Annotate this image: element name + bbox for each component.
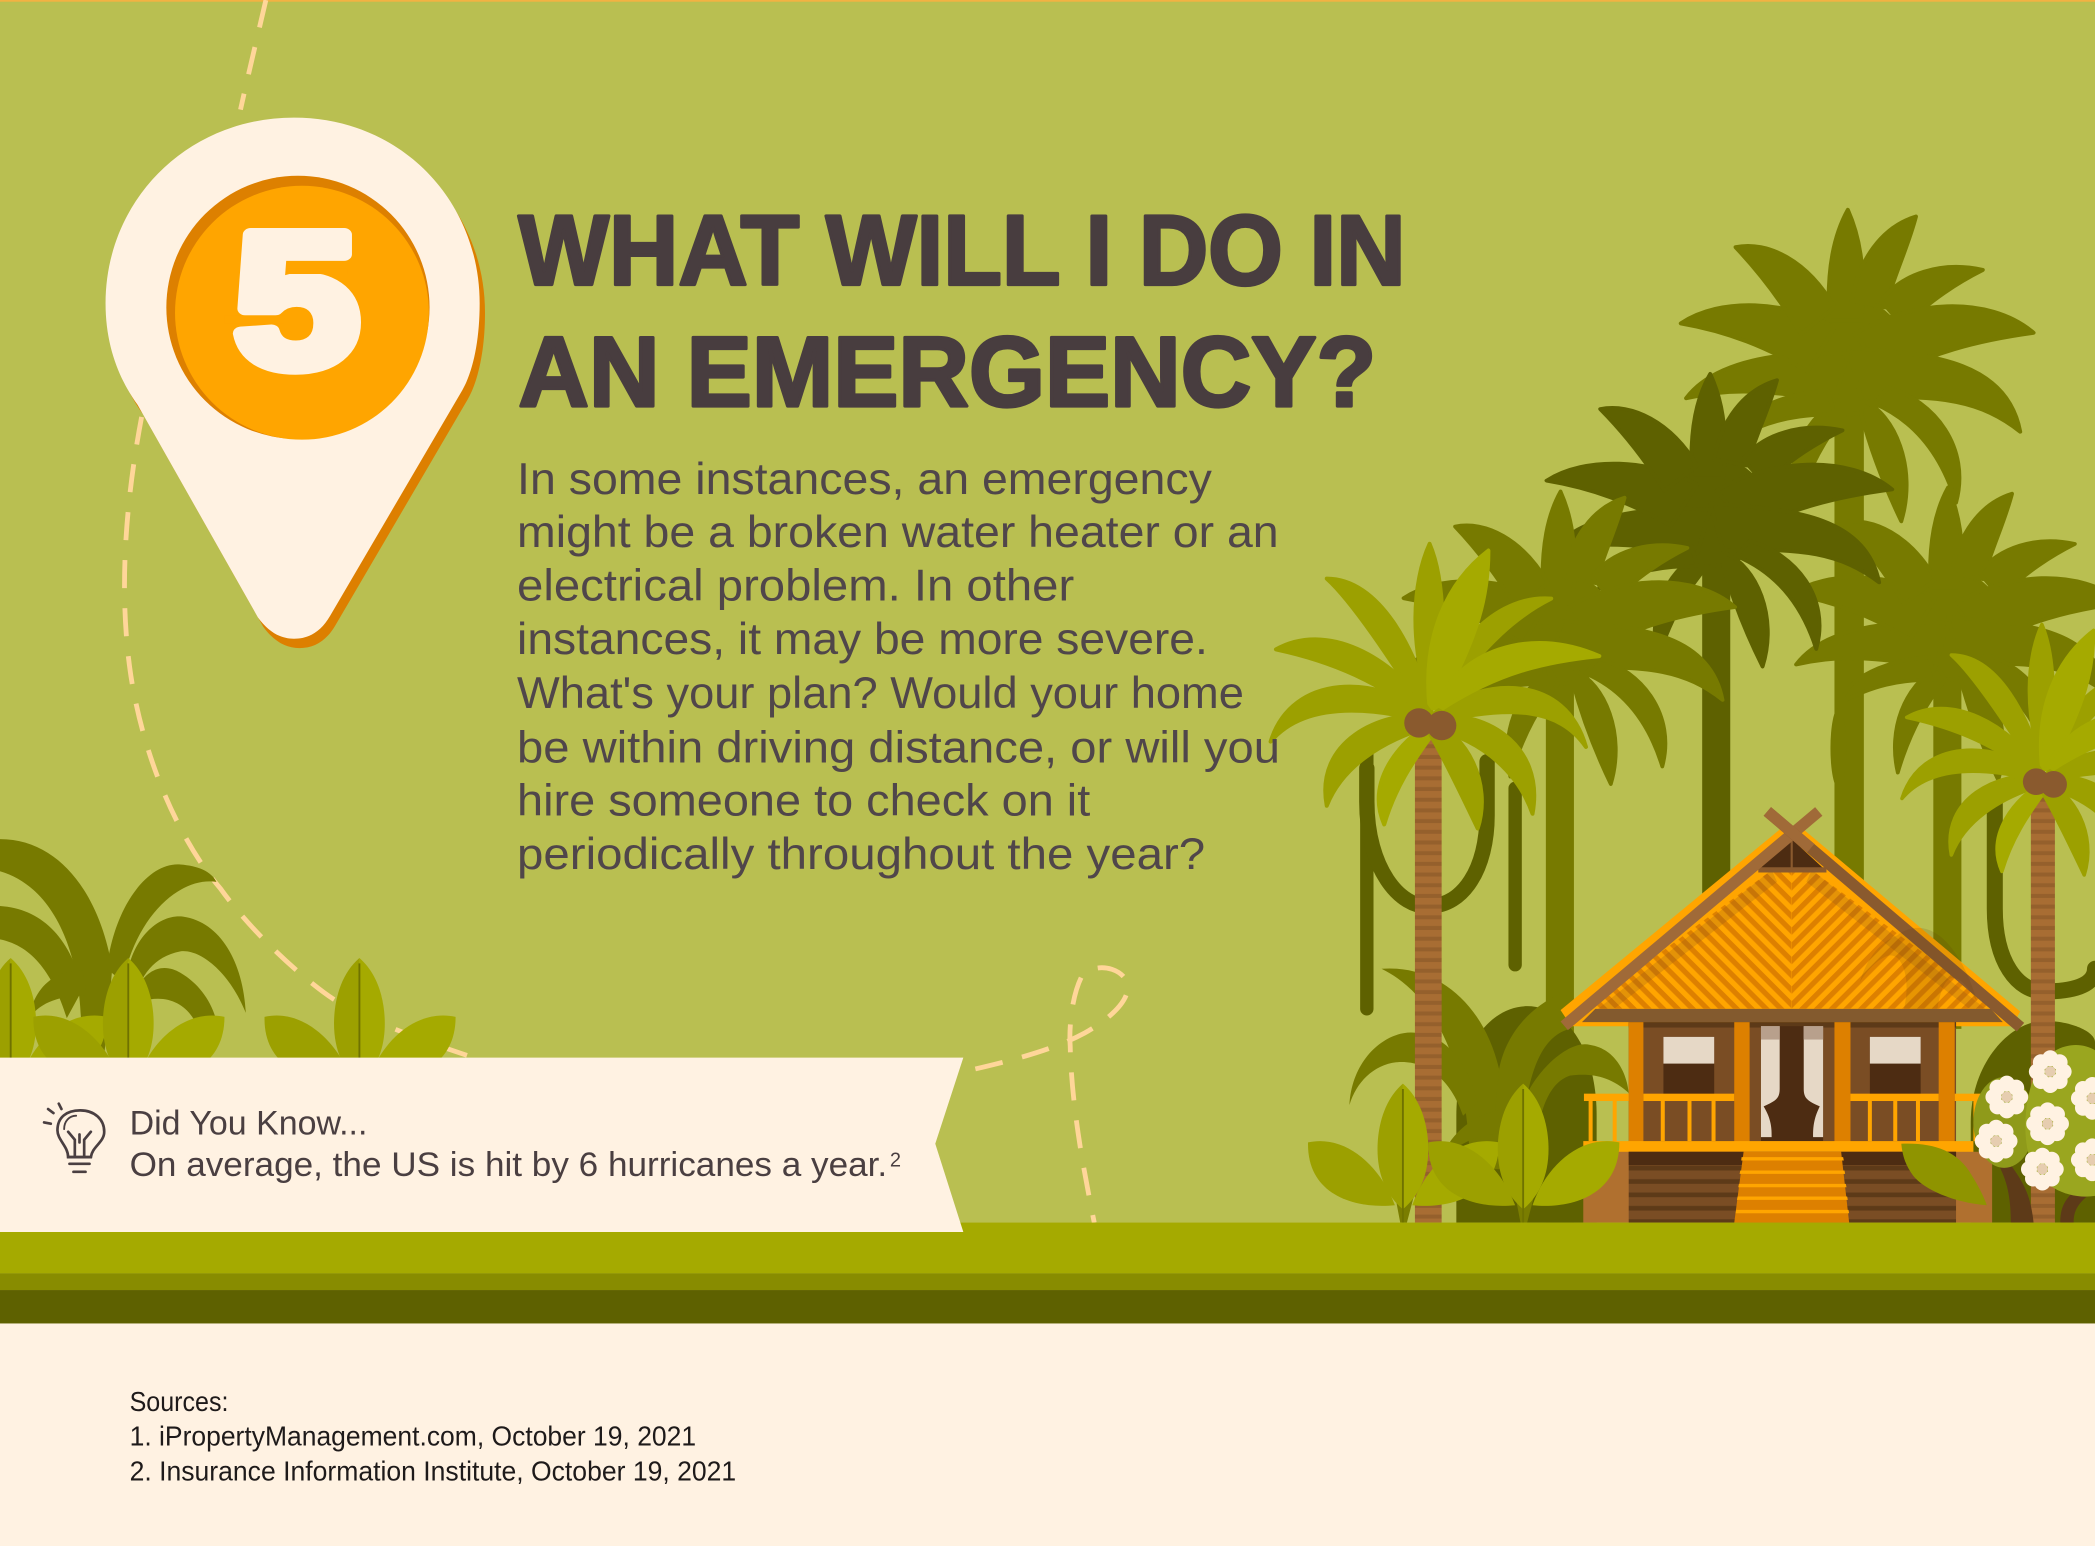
did you know text: On average, the US is hit by 6 hurricanes a year.: [130, 1146, 887, 1184]
tropical plant behind house: [1349, 968, 1629, 1169]
sources: [130, 1386, 736, 1486]
dashed route line: [125, 0, 1128, 1223]
did you know text: 2: [890, 1149, 901, 1171]
hanging vines: [1367, 748, 2095, 1009]
icon: light bulb: [44, 1104, 104, 1172]
roof framing: [1569, 815, 2016, 1024]
banana plant: shrub centre: [33, 958, 224, 1097]
foundation: [1583, 1152, 1992, 1223]
body paragraph: In some instances, an emergency: [517, 455, 1212, 504]
banana leaf: right: [1901, 1144, 1987, 1205]
palm tree: left background: [1404, 491, 1735, 1223]
roof chevron panel: [1597, 872, 1986, 1009]
banana plant: left: [1308, 1084, 1499, 1223]
palm tree: dark middle: [1547, 374, 1892, 909]
flowering bush: [1973, 1045, 2095, 1223]
body paragraph: electrical problem. In other: [517, 562, 1074, 611]
porch railings: [1584, 1094, 1981, 1141]
did you know text: [130, 1104, 901, 1184]
sources: 1. iPropertyManagement.com, October 19, 2021: [130, 1421, 696, 1452]
body paragraph: What's your plan? Would your home: [517, 669, 1244, 718]
eave beam: [1582, 1009, 2003, 1022]
title: WHAT WILL I DO IN: [518, 195, 1406, 306]
ground stripes: [0, 1223, 2095, 1323]
title: [518, 195, 1406, 427]
map pin: [106, 118, 480, 639]
stairs: [1734, 1152, 1849, 1223]
did you know banner: [0, 1058, 963, 1232]
body paragraph: [517, 455, 1280, 879]
body paragraph: be within driving distance, or will you: [517, 723, 1280, 772]
house: [1561, 815, 2020, 1223]
body paragraph: periodically throughout the year?: [517, 830, 1205, 879]
map pin shadow: [111, 127, 485, 648]
banana plant: shrub right: [265, 958, 456, 1097]
palm tree: light front right: [1902, 625, 2095, 1223]
palm shadow on roof: [1860, 928, 1977, 1009]
left shrub fronds: [0, 839, 246, 1056]
footer background: [0, 1323, 2095, 1546]
right window: [1870, 1037, 1921, 1094]
number badge: 5: [234, 194, 359, 407]
banana plant: far left: [0, 958, 107, 1097]
porch posts: [1629, 1022, 1955, 1142]
palm tree: right background: [1791, 487, 2095, 1029]
roof outer thatch: [1561, 828, 2020, 1026]
top accent line: [0, 0, 2095, 2]
gable opening: [1758, 839, 1825, 870]
palm tree: tallest background: [1681, 210, 2034, 895]
walls: [1629, 1022, 1956, 1142]
number badge: [166, 176, 430, 440]
bushes behind house: [1456, 1006, 2095, 1223]
body paragraph: instances, it may be more severe.: [517, 615, 1208, 664]
left window: [1663, 1037, 1714, 1094]
body paragraph: hire someone to check on it: [517, 777, 1090, 826]
porch floor: [1583, 1141, 1973, 1152]
sources: Sources:: [130, 1386, 228, 1417]
sources: 2. Insurance Information Institute, October 19, 2021: [130, 1455, 736, 1486]
did you know text: Did You Know...: [130, 1104, 367, 1142]
body paragraph: might be a broken water heater or an: [517, 508, 1279, 557]
title: AN EMERGENCY?: [518, 316, 1376, 427]
banana plant: middle: [1428, 1084, 1619, 1223]
palm tree: light front left: [1271, 544, 1599, 1223]
door with curtains: [1761, 1026, 1823, 1141]
